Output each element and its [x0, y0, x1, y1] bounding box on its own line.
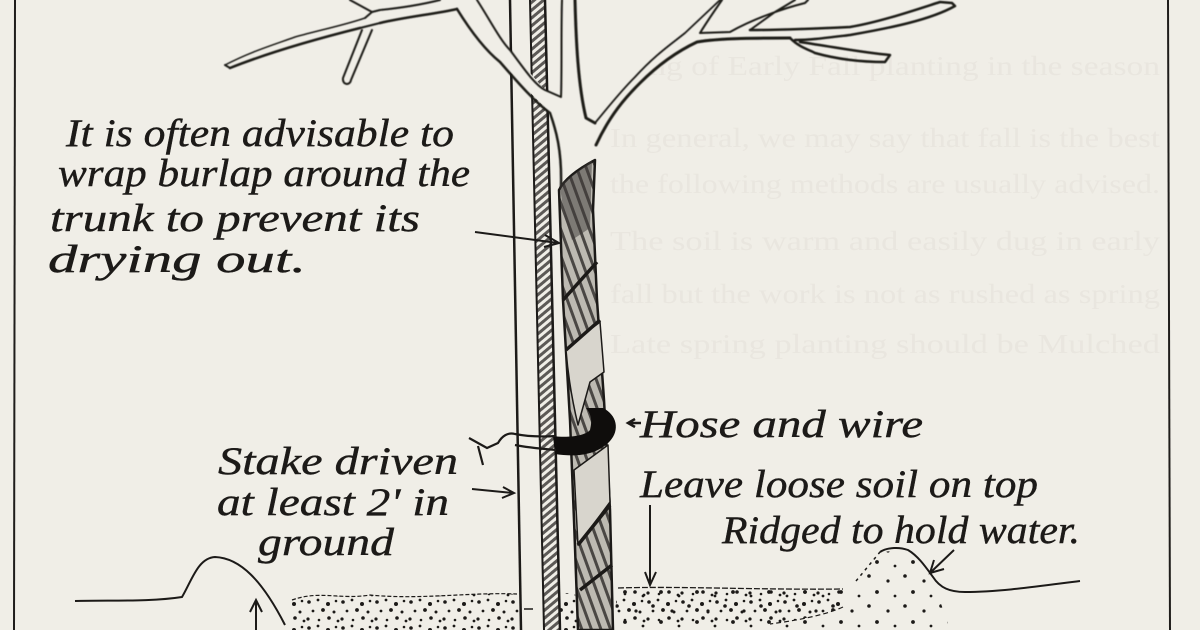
ghost text showing through the page: In general, we may say that fall is the best — [610, 123, 1161, 153]
ghost text showing through the page: fall but the work is not as rushed as spring — [610, 279, 1160, 309]
label: stake note: ground — [258, 521, 395, 564]
label: hose and wire: Hose and wire — [639, 403, 923, 446]
ghost text showing through the page: ing of Early Fall planting in the season — [640, 51, 1161, 81]
label: burlap note — [48, 112, 470, 281]
ghost text showing through the page: Late spring planting should be Mulched — [610, 329, 1161, 359]
ghost text showing through the page — [610, 51, 1161, 359]
soil layer with ridges — [75, 548, 1080, 630]
label: burlap note: wrap burlap around the — [58, 152, 470, 195]
label: burlap note: drying out. — [48, 238, 306, 281]
arrow: to loose soil — [645, 505, 656, 585]
icon: stake — [510, 0, 560, 630]
ghost text showing through the page: The soil is warm and easily dug in early — [610, 226, 1161, 256]
arrow: to ridge — [930, 550, 954, 573]
label: burlap note: trunk to prevent its — [50, 197, 420, 240]
icon: tree branches and trunk — [225, 0, 955, 190]
label: burlap note: It is often advisable to — [65, 112, 454, 155]
arrow: to burlap — [475, 232, 559, 247]
arrow: up to left ridge — [250, 600, 262, 630]
label: stake note: Stake driven — [218, 440, 458, 483]
label: stake note: at least 2' in — [217, 481, 449, 524]
arrow: to stake — [472, 487, 514, 498]
label: ridge note: Ridged to hold water. — [721, 509, 1080, 552]
arrow: to hose — [628, 419, 641, 427]
label: loose soil: Leave loose soil on top — [639, 463, 1038, 506]
icon: hose and wire — [469, 408, 616, 465]
label: stake note — [217, 440, 458, 564]
icon: trunk with burlap wrap — [559, 160, 613, 630]
ghost text showing through the page: the following methods are usually advised. — [610, 169, 1160, 199]
